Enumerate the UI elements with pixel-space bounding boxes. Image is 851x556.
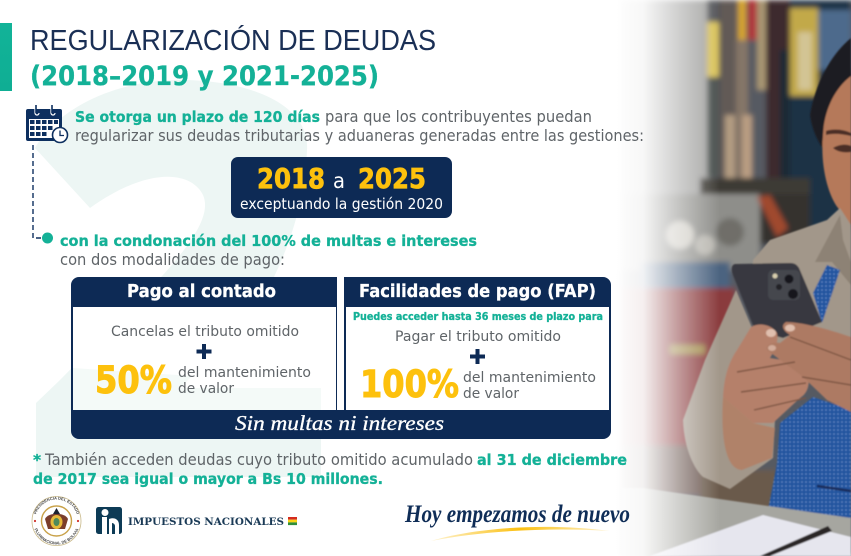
logo: impuestos nacionales	[96, 507, 297, 534]
intro text: para que los contribuyentes puedan	[325, 107, 592, 126]
background watermark: number 2	[35, 80, 321, 477]
left content: del mantenimiento	[178, 365, 311, 381]
panel: FAP body	[346, 307, 609, 410]
photo foreground: woman	[645, 38, 851, 556]
callout: years box	[231, 157, 452, 218]
title: REGULARIZACIÓN DE DEUDAS	[30, 24, 436, 57]
face	[822, 76, 851, 226]
right content: del mantenimiento	[463, 370, 596, 386]
condonation text	[60, 232, 477, 269]
intro text	[75, 107, 644, 145]
panel: payment options	[71, 277, 611, 439]
pen	[760, 526, 832, 556]
photo white fade	[610, 0, 720, 556]
title: (2018–2019 y 2021-2025)	[30, 61, 379, 92]
title	[30, 24, 436, 92]
condonation text: con la condonación del 100% de multas e intereses	[60, 232, 477, 250]
phone camera	[768, 270, 800, 300]
sweater body and sleeve	[683, 208, 851, 489]
apron pocket seam	[817, 486, 851, 491]
right content: de valor	[463, 386, 519, 402]
callout: years box: 2018	[257, 163, 325, 195]
left content: de valor	[178, 381, 234, 397]
table	[645, 489, 851, 554]
right hand	[767, 322, 851, 412]
icon: calendar with clock	[26, 105, 68, 142]
connector: dashed line and dot	[33, 145, 53, 244]
apron	[768, 397, 851, 520]
logo: state seal: PLURINACIONAL DE BOLIVIA	[34, 528, 78, 544]
left hand	[723, 325, 809, 423]
callout: years box: a	[333, 169, 345, 193]
intro text: Se otorga un plazo de 120 días	[75, 108, 320, 126]
finger creases and nails	[737, 324, 851, 410]
right content: Puedes acceder hasta 36 meses de plazo para	[353, 311, 603, 323]
condonation text: con dos modalidades de pago:	[60, 250, 285, 269]
photo: woman using a phone in a shop	[610, 0, 851, 556]
right content: 100%	[360, 363, 459, 406]
panel: pago al contado body	[73, 307, 336, 410]
phone	[732, 263, 822, 338]
right content	[353, 311, 603, 406]
right content: Pagar el tributo omitido	[395, 329, 561, 345]
watermark inside left panel	[73, 368, 321, 410]
callout: years box: 2025	[358, 163, 426, 195]
intro text: regularizar sus deudas tributarias y aduaneras generadas entre las gestiones:	[75, 126, 644, 145]
logo: impuestos nacionales: IMPUESTOS NACIONALES	[128, 516, 284, 528]
accent bar	[0, 23, 12, 91]
photo background: blurred shelves	[620, 0, 851, 556]
paper	[650, 515, 851, 556]
footnote: *	[33, 451, 41, 469]
logo: state seal	[32, 496, 82, 546]
footnote: al 31 de diciembre	[477, 451, 627, 469]
hair	[810, 38, 851, 150]
slogan	[404, 501, 630, 541]
eye and brow	[826, 130, 851, 152]
panel frame	[71, 277, 611, 439]
forearm	[722, 397, 775, 470]
callout: years box: exceptuando la gestión 2020	[240, 195, 443, 213]
footnote: También acceden deudas cuyo tributo omitido acumulado	[44, 450, 473, 469]
slogan: Hoy empezamos de nuevo	[404, 501, 630, 528]
footer label: Sin multas ni intereses	[235, 411, 444, 435]
logo: state seal: PRESIDENCIA DEL ESTADO	[34, 496, 80, 514]
heading: pago al contado: Pago al contado	[127, 282, 276, 302]
footnote: de 2017 sea igual o mayor a Bs 10 millones.	[33, 470, 383, 488]
left content: 50%	[95, 359, 172, 402]
collar shading	[815, 215, 851, 285]
left content	[95, 324, 311, 402]
left content: Cancelas el tributo omitido	[111, 324, 299, 340]
heading: facilidades de pago: Facilidades de pago (FAP)	[359, 282, 596, 302]
apron strap	[813, 265, 840, 323]
footnote	[33, 450, 627, 488]
